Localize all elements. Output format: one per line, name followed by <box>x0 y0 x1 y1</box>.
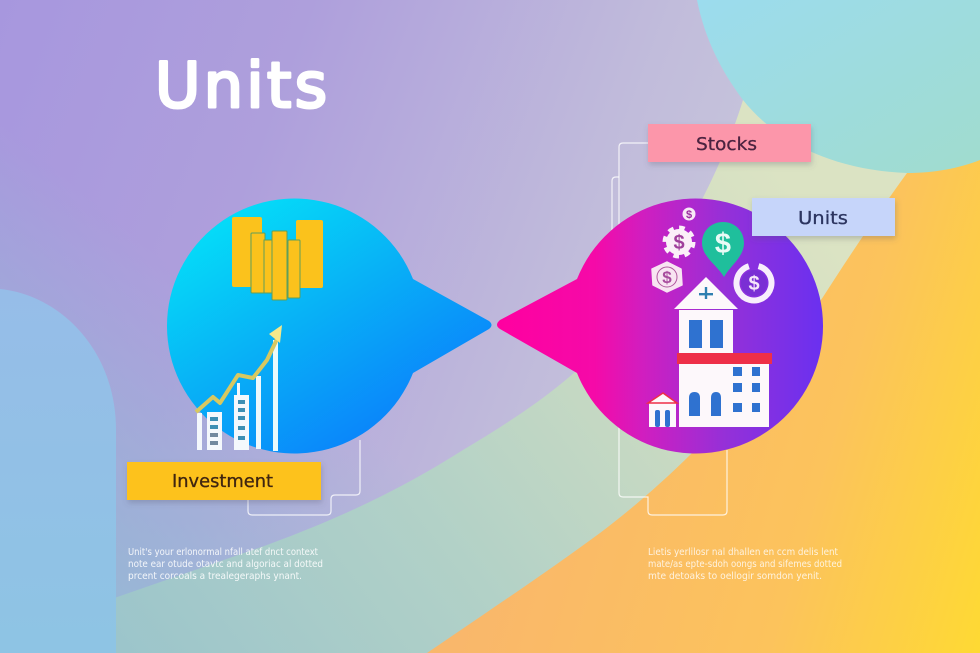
icon: small coin: $ <box>686 209 692 221</box>
text block: left note: Unit's your erlonormal nfall atef dnct context <box>128 547 318 558</box>
bubble: stocks and units <box>497 199 823 454</box>
icon: small coin <box>682 208 696 221</box>
bubble: investment <box>167 199 492 454</box>
label: units <box>752 198 895 236</box>
label: stocks <box>648 124 811 162</box>
text block: right note: mate/as epte-sdoh oongs and sifemes dotted <box>648 559 842 570</box>
icon: building <box>648 277 772 427</box>
icon: ring coin: $ <box>748 273 760 295</box>
text block: right note: Lietis yerlilosr nal dhallen en ccm delis lent <box>648 547 838 558</box>
label: investment: Investment <box>172 472 273 492</box>
text block: left note: note ear otude otavtc and algoriac al dotted <box>128 559 323 570</box>
icon: hexagon coin: $ <box>662 268 672 287</box>
icon: growth chart <box>196 325 282 451</box>
text block: left note: prcent corcoals a trealegeraphs ynant. <box>128 571 302 582</box>
icon: location pin dollar <box>702 222 744 277</box>
icon: gear coin <box>665 228 693 256</box>
label: investment <box>127 462 321 500</box>
label: units: Units <box>798 208 848 229</box>
text block: left note <box>128 547 323 582</box>
icon: gear coin: $ <box>673 232 685 254</box>
text block: right note <box>648 547 842 582</box>
icon: ring coin <box>733 262 775 304</box>
text block: right note: mte detoaks to oellogir somdon yenit. <box>648 571 822 582</box>
icon: location pin dollar: $ <box>715 228 731 260</box>
icon: hexagon coin <box>652 262 682 292</box>
icon: gold bars <box>232 217 323 300</box>
title: Units <box>155 49 327 122</box>
label: stocks: Stocks <box>696 134 757 155</box>
connector lines <box>248 143 727 515</box>
